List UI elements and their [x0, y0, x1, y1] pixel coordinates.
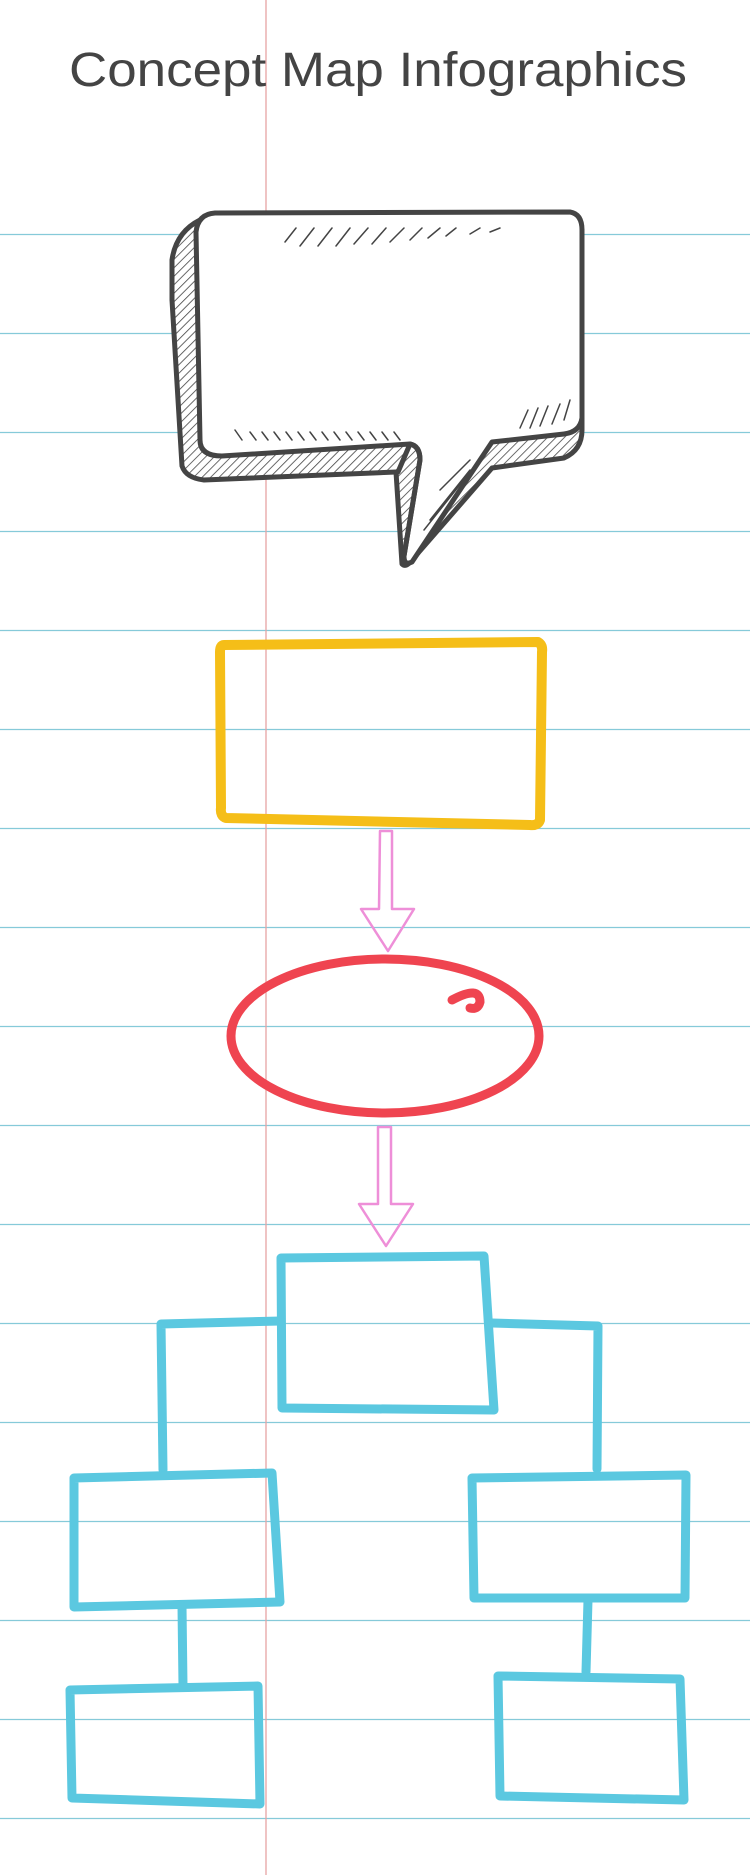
- blue concept tree: [70, 1256, 686, 1804]
- arrow 2: [359, 1127, 413, 1246]
- arrow 1: [361, 831, 414, 951]
- title: Concept Map Infographics: [69, 44, 687, 97]
- red ellipse: [231, 959, 539, 1113]
- icon: speech bubble: [172, 212, 582, 565]
- yellow box: [220, 642, 542, 825]
